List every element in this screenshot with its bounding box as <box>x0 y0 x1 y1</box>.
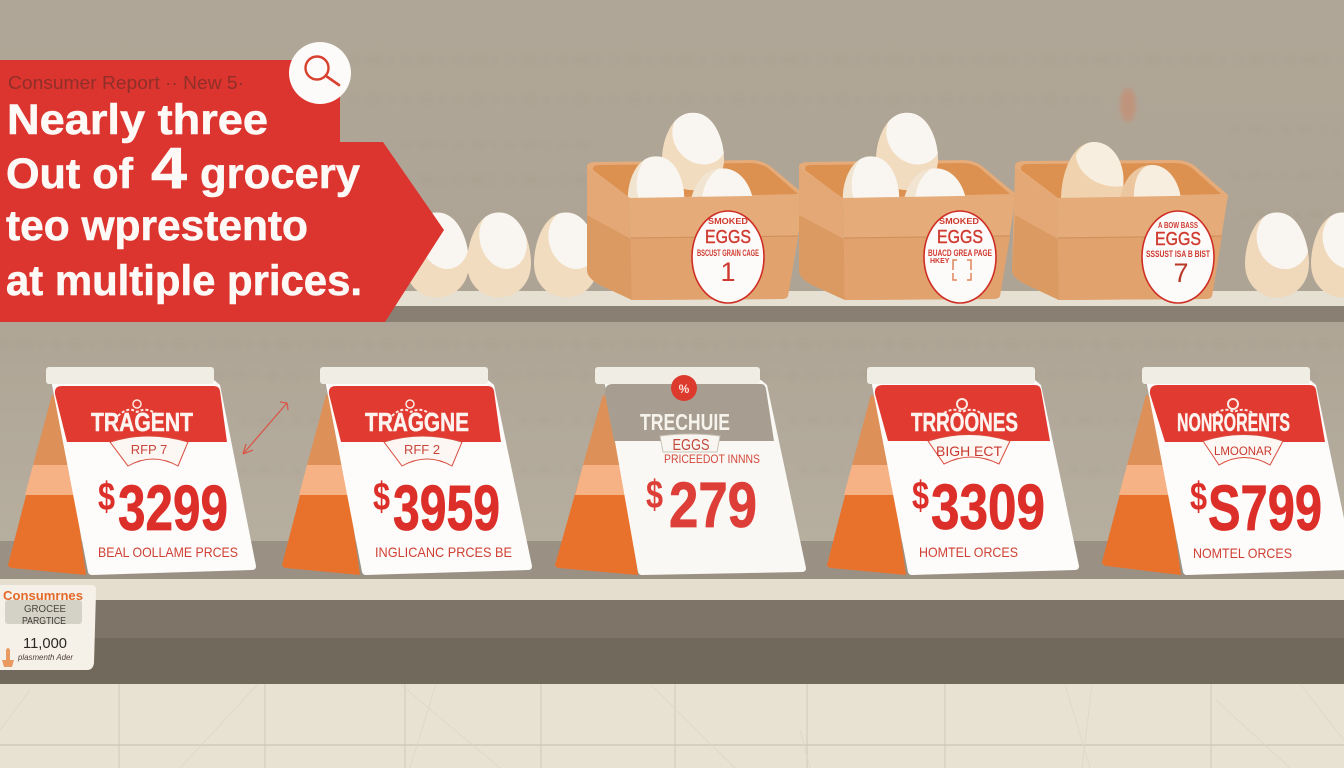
icon: small basket <box>2 648 14 667</box>
headline: at multiple prices. <box>6 257 362 305</box>
price card 1 <box>8 367 256 575</box>
egg carton 1 <box>587 99 805 303</box>
price card 5: LMOONAR <box>1214 444 1272 458</box>
price card 2: TRAGGNE <box>365 407 469 437</box>
egg label 3 <box>1142 211 1214 303</box>
price card 3: EGGS <box>672 437 710 454</box>
egg label 2: HKEY <box>930 258 950 265</box>
arrow: red diagonal <box>243 402 288 454</box>
price card 1: BEAL OOLLAME PRCES <box>98 544 238 560</box>
price card 1: RFP 7 <box>131 442 167 457</box>
headline banner <box>0 60 444 322</box>
price card 3: 279 <box>669 469 757 541</box>
egg label 1: EGGS <box>705 227 751 247</box>
egg label 3: A BOW BASS <box>1158 221 1199 230</box>
kicker text: Consumer Report ·· New 5· <box>8 73 244 93</box>
wall background <box>0 0 1344 545</box>
price card 3: PRICEEDOT INNNS <box>664 452 760 466</box>
tiled floor <box>0 684 1344 768</box>
price card 3 <box>555 367 806 575</box>
price card 4: HOMTEL ORCES <box>919 544 1018 560</box>
price card 4: BIGH ECT <box>936 443 1002 459</box>
price card 4: TRROONES <box>911 407 1018 437</box>
icon: red badge <box>671 375 697 401</box>
headline: Out of <box>6 150 134 198</box>
price card 1: 3299 <box>118 472 228 544</box>
consumer note card: PARGTICE <box>22 616 66 627</box>
egg label 3: 7 <box>1173 258 1189 288</box>
egg label 2: EGGS <box>937 227 983 247</box>
price card 2: RFF 2 <box>404 442 440 457</box>
price card 3: $ <box>646 473 663 517</box>
egg carton 3 <box>1012 142 1228 303</box>
egg carton 2 <box>799 99 1017 303</box>
egg label 2: SMOKED <box>939 217 979 226</box>
price card 5: $ <box>1190 475 1207 519</box>
lower shelf <box>0 541 1344 684</box>
consumer note card <box>0 585 96 670</box>
egg label 3: SSSUST ISA B BIST <box>1146 249 1210 259</box>
price card 2: 3959 <box>393 472 500 544</box>
egg label 2: BUACD GREA PAGE <box>928 248 992 258</box>
headline <box>6 96 362 305</box>
price card 4: $ <box>912 474 929 518</box>
price card 4 <box>827 367 1079 575</box>
egg label 3: EGGS <box>1155 229 1201 249</box>
price card 2 <box>282 367 532 575</box>
consumer note card: Consumrnes <box>3 588 83 603</box>
consumer note card: plasmenth Ader <box>17 653 73 662</box>
icon: magnifying glass <box>289 42 351 104</box>
headline: 4 <box>151 136 187 201</box>
egg label 1: 1 <box>720 257 736 287</box>
egg label 1: BSCUST GRAIN CAGE <box>697 248 759 258</box>
price card 3: % <box>679 382 690 396</box>
headline: teo wprestento <box>6 202 308 250</box>
price card 5: NOMTEL ORCES <box>1193 545 1292 561</box>
consumer note card: 11,000 <box>23 635 67 652</box>
price card 2: INGLICANC PRCES BE <box>375 544 512 560</box>
egg label 1 <box>692 211 764 303</box>
headline: grocery <box>200 150 360 198</box>
price card 1: TRAGENT <box>91 407 193 437</box>
egg label 2 <box>924 211 996 303</box>
price card 4: 3309 <box>931 471 1045 543</box>
consumer note card: GROCEE <box>24 604 66 615</box>
egg label 1: SMOKED <box>708 217 748 226</box>
price card 2: $ <box>373 475 390 519</box>
price card 3: TRECHUIE <box>640 409 730 435</box>
price card 5 <box>1102 367 1344 575</box>
price card 1: $ <box>98 475 115 519</box>
upper shelf <box>0 291 1344 322</box>
loose eggs right <box>1245 212 1344 298</box>
headline: Nearly three <box>7 96 268 144</box>
loose eggs left <box>410 212 594 298</box>
